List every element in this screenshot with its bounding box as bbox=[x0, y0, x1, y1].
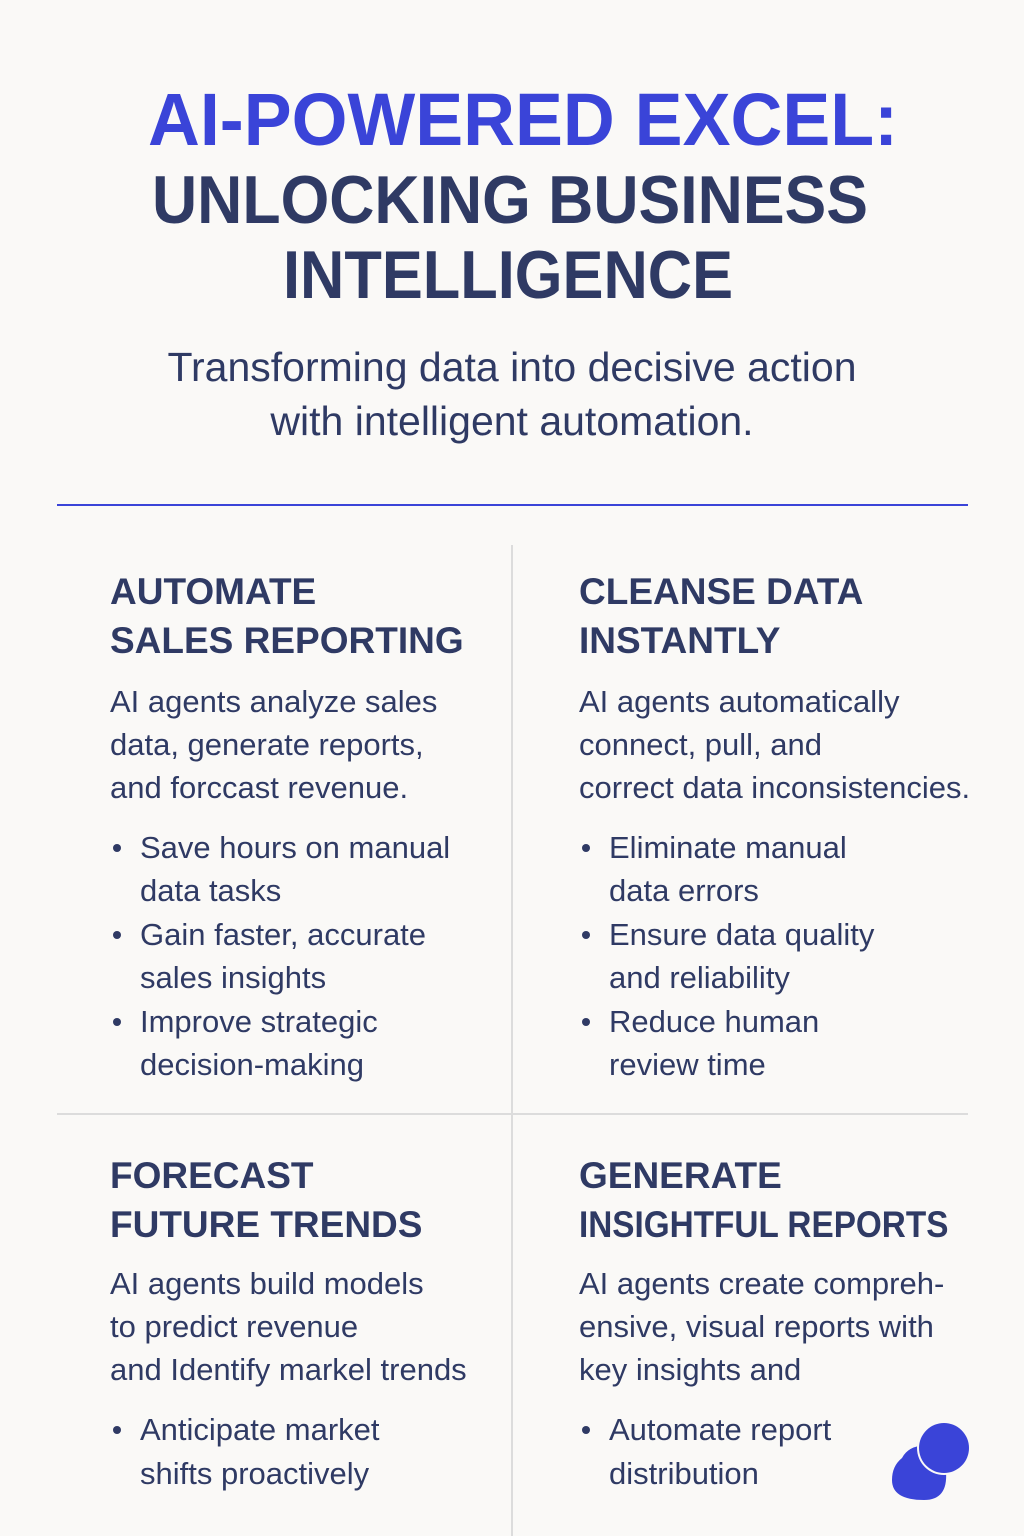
description: and forccast revenue. bbox=[110, 770, 408, 805]
bullets: and reliability bbox=[609, 960, 790, 995]
heading: FUTURE TRENDS bbox=[110, 1204, 422, 1245]
bullets: Eliminate manual bbox=[609, 830, 847, 865]
description: ensive, visual reports with bbox=[579, 1309, 934, 1344]
panel: automate sales reporting bbox=[110, 571, 464, 1082]
title: UNLOCKING BUSINESS bbox=[152, 162, 868, 238]
description: correct data inconsistencies. bbox=[579, 770, 970, 805]
description bbox=[579, 684, 970, 805]
description: key insights and bbox=[579, 1352, 801, 1387]
panel: generate reports bbox=[579, 1155, 948, 1491]
bullets: decision-making bbox=[140, 1047, 364, 1082]
heading: CLEANSE DATA bbox=[579, 571, 863, 612]
bullets: sales insights bbox=[140, 960, 326, 995]
bullets: distribution bbox=[609, 1456, 759, 1491]
description: AI agents analyze sales bbox=[110, 684, 437, 719]
description bbox=[110, 684, 437, 805]
subtitle: with intelligent automation. bbox=[270, 398, 754, 444]
description: to predict revenue bbox=[110, 1309, 358, 1344]
heading: INSTANTLY bbox=[579, 620, 780, 661]
bullets: shifts proactively bbox=[140, 1456, 369, 1491]
description: connect, pull, and bbox=[579, 727, 822, 762]
heading bbox=[579, 1155, 948, 1245]
bullets: data tasks bbox=[140, 873, 281, 908]
subtitle bbox=[168, 344, 856, 444]
title: AI-POWERED EXCEL: bbox=[148, 78, 898, 161]
description: AI agents create compreh- bbox=[579, 1266, 944, 1301]
bullets: Improve strategic bbox=[140, 1004, 378, 1039]
panel: forecast bbox=[110, 1155, 467, 1491]
description: and Identify markel trends bbox=[110, 1352, 467, 1387]
heading: FORECAST bbox=[110, 1155, 314, 1196]
title bbox=[148, 78, 898, 313]
panel: cleanse data bbox=[579, 571, 970, 1082]
description: data, generate reports, bbox=[110, 727, 424, 762]
bullets: data errors bbox=[609, 873, 759, 908]
icon: circles bbox=[892, 1423, 969, 1500]
bullets bbox=[582, 1412, 831, 1491]
bullets: review time bbox=[609, 1047, 766, 1082]
heading: INSIGHTFUL REPORTS bbox=[579, 1204, 948, 1245]
bullets bbox=[113, 830, 450, 1082]
description bbox=[110, 1266, 467, 1387]
subtitle: Transforming data into decisive action bbox=[168, 344, 856, 390]
bullets: Save hours on manual bbox=[140, 830, 450, 865]
heading bbox=[110, 1155, 422, 1245]
bullets: Anticipate market bbox=[140, 1412, 380, 1447]
heading bbox=[579, 571, 863, 661]
description: AI agents automatically bbox=[579, 684, 900, 719]
bullets bbox=[582, 830, 874, 1082]
title: INTELLIGENCE bbox=[283, 237, 733, 313]
bullets bbox=[113, 1412, 380, 1491]
heading: GENERATE bbox=[579, 1155, 782, 1196]
heading: SALES REPORTING bbox=[110, 620, 464, 661]
description: AI agents build models bbox=[110, 1266, 424, 1301]
heading bbox=[110, 571, 464, 661]
heading: AUTOMATE bbox=[110, 571, 316, 612]
bullets: Automate report bbox=[609, 1412, 831, 1447]
bullets: Gain faster, accurate bbox=[140, 917, 426, 952]
bullets: Ensure data quality bbox=[609, 917, 874, 952]
description bbox=[579, 1266, 944, 1387]
bullets: Reduce human bbox=[609, 1004, 819, 1039]
